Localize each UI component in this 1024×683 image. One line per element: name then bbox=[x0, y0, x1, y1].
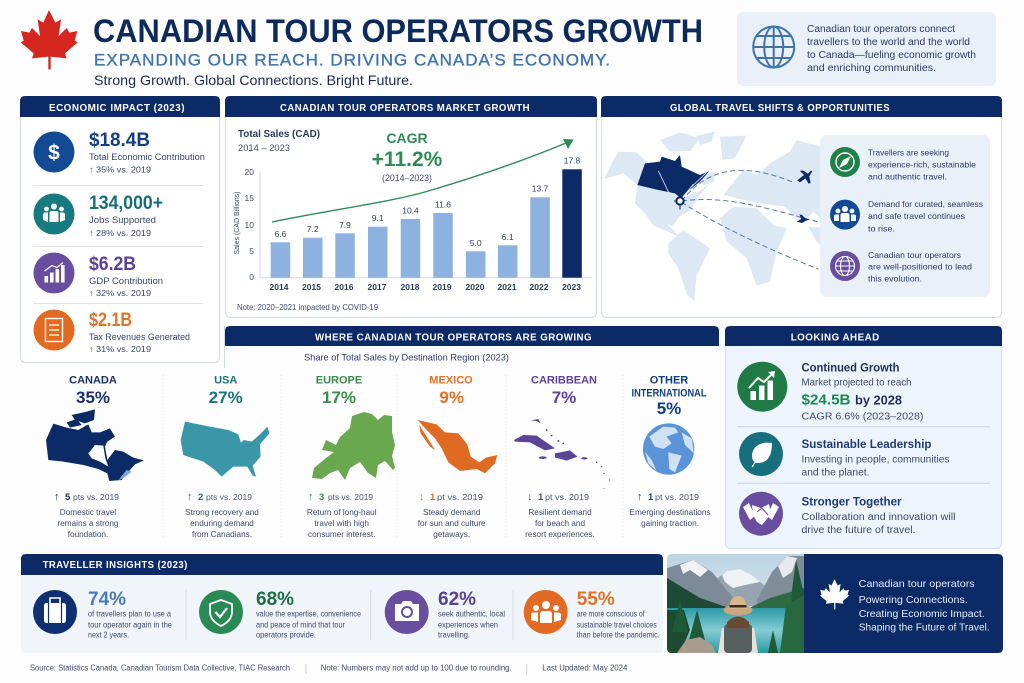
item: stronger together: Collaboration and innovation will bbox=[802, 512, 956, 523]
insight: 74 percent: of travellers plan to use a bbox=[88, 610, 172, 619]
metric: total economic contribution bbox=[34, 130, 205, 175]
closing text: Canadian tour operators bbox=[859, 578, 975, 590]
chart subtitle: Share of Total Sales by Destination Region (2023) bbox=[304, 353, 509, 364]
region: Europe: travel with high bbox=[314, 519, 369, 528]
map: USA bbox=[181, 422, 269, 477]
item: stronger together bbox=[739, 492, 956, 536]
bar chart: 2014 bbox=[270, 282, 289, 292]
icon: globe bbox=[830, 251, 860, 281]
subtitle: EXPANDING OUR REACH. DRIVING CANADA’S ECONOMY. bbox=[94, 51, 611, 70]
metric: gdp contribution: GDP Contribution bbox=[89, 276, 163, 286]
bar chart: 2019 bbox=[433, 282, 452, 292]
intro text bbox=[807, 24, 976, 74]
intro callout bbox=[737, 12, 996, 86]
bar chart: 2015 bbox=[302, 282, 321, 292]
insight: 68 percent bbox=[199, 589, 361, 640]
shift text 1: experience-rich, sustainable bbox=[868, 160, 976, 170]
bar chart: 2023 bbox=[562, 282, 581, 292]
insight: 55 percent bbox=[524, 589, 660, 640]
intro text: Canadian tour operators connect bbox=[807, 24, 955, 35]
region: Caribbean: resort experiences. bbox=[525, 530, 595, 539]
insight: 55 percent: sustainable travel choices bbox=[577, 620, 657, 630]
panel: economic impact bbox=[20, 96, 220, 362]
intro text: travellers to the world and the world bbox=[807, 37, 970, 48]
insight: 74 percent: 74% bbox=[88, 589, 126, 610]
insight: 68 percent: and peace of mind that tour bbox=[256, 620, 345, 630]
region: other international: 5% bbox=[657, 399, 681, 418]
region: other international: ↑ bbox=[637, 491, 642, 503]
footer: Last Updated: May 2024 bbox=[542, 664, 628, 673]
map: Europe bbox=[312, 412, 395, 480]
region: Mexico: for sun and culture bbox=[418, 519, 486, 528]
insight: 62 percent bbox=[385, 589, 505, 640]
region: Canada: pts vs. 2019 bbox=[73, 492, 119, 502]
insight: 62 percent: experiences when bbox=[438, 620, 498, 630]
metric: gdp contribution: $6.2B bbox=[89, 254, 136, 275]
item: continued growth: Market projected to reach bbox=[802, 378, 912, 389]
bar chart: 9.1 bbox=[372, 213, 384, 223]
metric: jobs supported: ↑ 28% vs. 2019 bbox=[89, 228, 151, 238]
region: Caribbean: Resilient demand bbox=[528, 508, 592, 517]
insight: 74 percent bbox=[33, 589, 173, 640]
callout: travel shifts bbox=[820, 135, 990, 297]
region: Caribbean: 7% bbox=[552, 388, 576, 407]
insight: 74 percent: next 2 years. bbox=[88, 631, 129, 640]
item: stronger together: Stronger Together bbox=[802, 495, 902, 509]
region: Mexico: 9% bbox=[439, 388, 464, 407]
bar chart: 2020 bbox=[466, 282, 485, 292]
bar chart: 2016 bbox=[335, 282, 354, 292]
region: USA: USA bbox=[214, 375, 237, 387]
panel: looking ahead bbox=[725, 326, 1002, 548]
region: USA: 27% bbox=[209, 388, 243, 407]
heading: economic impact: ECONOMIC IMPACT (2023) bbox=[49, 102, 185, 114]
intro text: to Canada—fueling economic growth bbox=[807, 50, 976, 61]
heading: market growth: CANADIAN TOUR OPERATORS MARKET GROWTH bbox=[280, 102, 530, 114]
metric: tax revenues: ↑ 31% vs. 2019 bbox=[89, 344, 151, 354]
item: stronger together: drive the future of travel. bbox=[802, 525, 916, 536]
metric: total economic contribution: $ bbox=[48, 142, 60, 164]
item: continued growth: by 2028 bbox=[855, 393, 902, 407]
bar chart: Sales (CAD Billions) bbox=[234, 191, 241, 255]
insight: 55 percent: 55% bbox=[577, 589, 615, 610]
intro text: and enriching communities. bbox=[807, 63, 936, 74]
region: Canada: remains a strong bbox=[58, 519, 119, 528]
metric: gdp contribution bbox=[34, 252, 163, 298]
CAGR callout: CAGR bbox=[386, 130, 428, 146]
metric: total economic contribution: $18.4B bbox=[89, 130, 150, 151]
item: continued growth bbox=[737, 361, 924, 423]
bar chart: 7.2 bbox=[307, 224, 319, 234]
region: Caribbean: 1 bbox=[538, 492, 544, 503]
bar chart: 11.6 bbox=[435, 200, 451, 210]
shift text 1: Travellers are seeking bbox=[868, 148, 949, 158]
region: Europe: 3 bbox=[319, 492, 324, 503]
bar chart: 13.7 bbox=[532, 184, 549, 194]
title: CANADIAN TOUR OPERATORS GROWTH bbox=[93, 13, 703, 49]
metric: total economic contribution: Total Economic Contribution bbox=[89, 152, 205, 162]
region: Mexico: Steady demand bbox=[423, 508, 481, 517]
bar chart bbox=[234, 156, 592, 292]
chart note: Note: 2020–2021 impacted by COVID-19 bbox=[237, 303, 379, 312]
insight: 55 percent: than before the pandemic. bbox=[577, 631, 660, 640]
region: USA: enduring demand bbox=[190, 519, 254, 528]
footer: Note: Numbers may not add up to 100 due to rounding. bbox=[321, 664, 512, 673]
icon: white maple leaf bbox=[820, 579, 849, 609]
photo: hiker at mountain lake bbox=[667, 554, 806, 653]
region: other international: gaining traction. bbox=[641, 519, 699, 528]
region: Europe bbox=[307, 375, 395, 539]
CAGR callout: +11.2% bbox=[372, 148, 443, 171]
CAGR callout: (2014–2023) bbox=[382, 173, 432, 183]
region: other international: 1 bbox=[648, 492, 654, 503]
metric: gdp contribution: ↑ 32% vs. 2019 bbox=[89, 288, 151, 298]
bar chart: 2018 bbox=[401, 282, 420, 292]
region: Canada: ↑ bbox=[54, 491, 60, 503]
insight: 62 percent: 62% bbox=[438, 589, 476, 610]
panel: global travel shifts bbox=[601, 96, 1002, 318]
region: Canada: Domestic travel bbox=[60, 508, 116, 517]
bar chart: 17.8 bbox=[564, 156, 581, 166]
region: USA: 2 bbox=[198, 492, 203, 503]
shift text 2: to rise. bbox=[868, 224, 895, 234]
item: continued growth: $24.5B bbox=[802, 391, 851, 408]
shift text 3 bbox=[868, 250, 972, 284]
bar chart: 2021 bbox=[498, 282, 517, 292]
region: Canada: CANADA bbox=[69, 375, 117, 387]
CAGR callout bbox=[372, 130, 443, 183]
item: sustainable leadership bbox=[739, 432, 950, 479]
footer: Source: Statistics Canada, Canadian Tourism Data Collective, TIAC Research bbox=[30, 664, 290, 673]
region: Mexico: MEXICO bbox=[429, 375, 473, 387]
bar chart: 10.4 bbox=[402, 206, 419, 216]
bar chart: 15 bbox=[245, 193, 254, 203]
region: Mexico: 1 bbox=[430, 492, 436, 503]
insight: 55 percent: are more conscious of bbox=[577, 610, 645, 619]
map: Canada bbox=[46, 409, 144, 481]
region: other international: pt vs. 2019 bbox=[655, 492, 699, 502]
closing banner bbox=[804, 554, 1003, 653]
region: other international: INTERNATIONAL bbox=[632, 388, 707, 400]
icon: compass bbox=[830, 147, 860, 177]
chart subtitle: Total Sales (CAD) bbox=[238, 129, 320, 140]
shift text 1: and authentic travel. bbox=[868, 172, 947, 182]
closing text: Shaping the Future of Travel. bbox=[859, 622, 990, 634]
item: sustainable leadership: Investing in people, communities bbox=[802, 454, 950, 465]
icon: red maple leaf bbox=[21, 10, 78, 69]
metric: jobs supported: Jobs Supported bbox=[89, 215, 156, 225]
shift text 2: and safe travel continues bbox=[868, 211, 965, 221]
bar chart: 6.6 bbox=[275, 229, 287, 239]
metric: tax revenues: Tax Revenues Generated bbox=[89, 332, 190, 342]
region: Europe: EUROPE bbox=[316, 375, 362, 387]
region: Europe: pts vs. 2019 bbox=[328, 492, 373, 502]
metric: jobs supported: 134,000+ bbox=[89, 193, 163, 214]
chart subtitle bbox=[238, 129, 320, 154]
shift text 3: are well-positioned to lead bbox=[868, 262, 972, 272]
insight: 62 percent: travelling. bbox=[438, 631, 470, 640]
heading: where growing: WHERE CANADIAN TOUR OPERATORS ARE GROWING bbox=[315, 332, 592, 344]
region: Caribbean: for beach and bbox=[535, 519, 585, 528]
bar chart: 2017 bbox=[368, 282, 387, 292]
region: Europe: consumer interest. bbox=[308, 530, 375, 539]
region: Caribbean: CARIBBEAN bbox=[531, 375, 597, 387]
bar chart: 2022 bbox=[530, 282, 549, 292]
heading: looking ahead: LOOKING AHEAD bbox=[791, 332, 880, 344]
shift text 2 bbox=[868, 199, 983, 234]
closing text: Powering Connections. bbox=[859, 594, 968, 606]
bar chart: 5.0 bbox=[470, 238, 482, 248]
trend arrow bbox=[272, 139, 574, 222]
metric: jobs supported bbox=[34, 193, 163, 238]
chart subtitle: 2014 – 2023 bbox=[238, 143, 290, 154]
closing text: Creating Economic Impact. bbox=[859, 608, 985, 620]
region: other international: OTHER bbox=[650, 375, 688, 387]
shift text 3: this evolution. bbox=[868, 274, 922, 284]
bar chart: 6.1 bbox=[502, 232, 514, 242]
footer bbox=[30, 664, 628, 674]
insight: 68 percent: 68% bbox=[256, 589, 294, 610]
region: Europe: Return of long-haul bbox=[307, 508, 377, 517]
shift text 1 bbox=[868, 148, 976, 182]
tagline: Strong Growth. Global Connections. Bright Future. bbox=[94, 72, 413, 88]
region: Mexico bbox=[418, 375, 497, 539]
bar chart: 0 bbox=[249, 272, 254, 282]
item: continued growth: Continued Growth bbox=[802, 361, 900, 375]
item: sustainable leadership: Sustainable Leadership bbox=[802, 437, 932, 451]
bar chart: 5 bbox=[249, 246, 254, 256]
region: USA: from Canadians. bbox=[192, 530, 252, 539]
region: Mexico: pt vs. 2019 bbox=[437, 492, 483, 502]
world map bbox=[604, 132, 827, 301]
region: USA bbox=[181, 375, 269, 539]
heading: traveller insights: TRAVELLER INSIGHTS (2023) bbox=[43, 559, 188, 571]
closing text bbox=[859, 578, 990, 634]
bar chart: 20 bbox=[245, 167, 254, 177]
shift text 2: Demand for curated, seamless bbox=[868, 199, 983, 209]
region: Mexico: ↓ bbox=[419, 491, 424, 503]
region: Caribbean: pt vs. 2019 bbox=[545, 492, 589, 502]
panel: traveller insights bbox=[21, 554, 663, 653]
panel: destination header bbox=[224, 326, 719, 368]
icon: blue globe bbox=[643, 423, 694, 475]
region: USA: ↑ bbox=[187, 491, 192, 503]
map: Mexico bbox=[418, 420, 497, 473]
insight: 62 percent: seek authentic, local bbox=[438, 610, 505, 619]
region: Canada bbox=[46, 375, 144, 539]
insight: 68 percent: value the expertise, convenience bbox=[256, 610, 361, 619]
region: Mexico: getaways. bbox=[433, 530, 470, 539]
region: other international bbox=[629, 375, 711, 528]
heading: global travel: GLOBAL TRAVEL SHIFTS & OPPORTUNITIES bbox=[670, 102, 890, 114]
region: Europe: 17% bbox=[322, 388, 356, 407]
region: Canada: foundation. bbox=[68, 530, 108, 539]
metric: tax revenues bbox=[34, 310, 190, 354]
region: Caribbean bbox=[514, 375, 610, 539]
region: other international: Emerging destinations bbox=[629, 508, 711, 517]
item: continued growth: CAGR 6.6% (2023–2028) bbox=[802, 412, 924, 423]
bar chart: 10 bbox=[245, 220, 254, 230]
bar chart: 7.9 bbox=[339, 220, 351, 230]
icon: people bbox=[830, 200, 860, 230]
shift text 3: Canadian tour operators bbox=[868, 250, 961, 260]
panel: market growth bbox=[225, 96, 597, 318]
insight: 68 percent: operators provide. bbox=[256, 631, 316, 640]
region: Europe: ↑ bbox=[308, 491, 314, 503]
map: Caribbean bbox=[514, 419, 610, 489]
metric: tax revenues: $2.1B bbox=[89, 310, 132, 331]
region: Canada: 5 bbox=[65, 492, 71, 503]
region: USA: pts vs. 2019 bbox=[206, 492, 252, 502]
region: Caribbean: ↓ bbox=[527, 491, 532, 503]
item: sustainable leadership: and the planet. bbox=[802, 468, 870, 479]
region: USA: Strong recovery and bbox=[185, 508, 259, 517]
metric: total economic contribution: ↑ 35% vs. 2019 bbox=[89, 165, 151, 175]
insight: 74 percent: tour operator again in the bbox=[88, 620, 173, 630]
region: Canada: 35% bbox=[76, 388, 110, 407]
icon: globe bbox=[753, 26, 794, 68]
